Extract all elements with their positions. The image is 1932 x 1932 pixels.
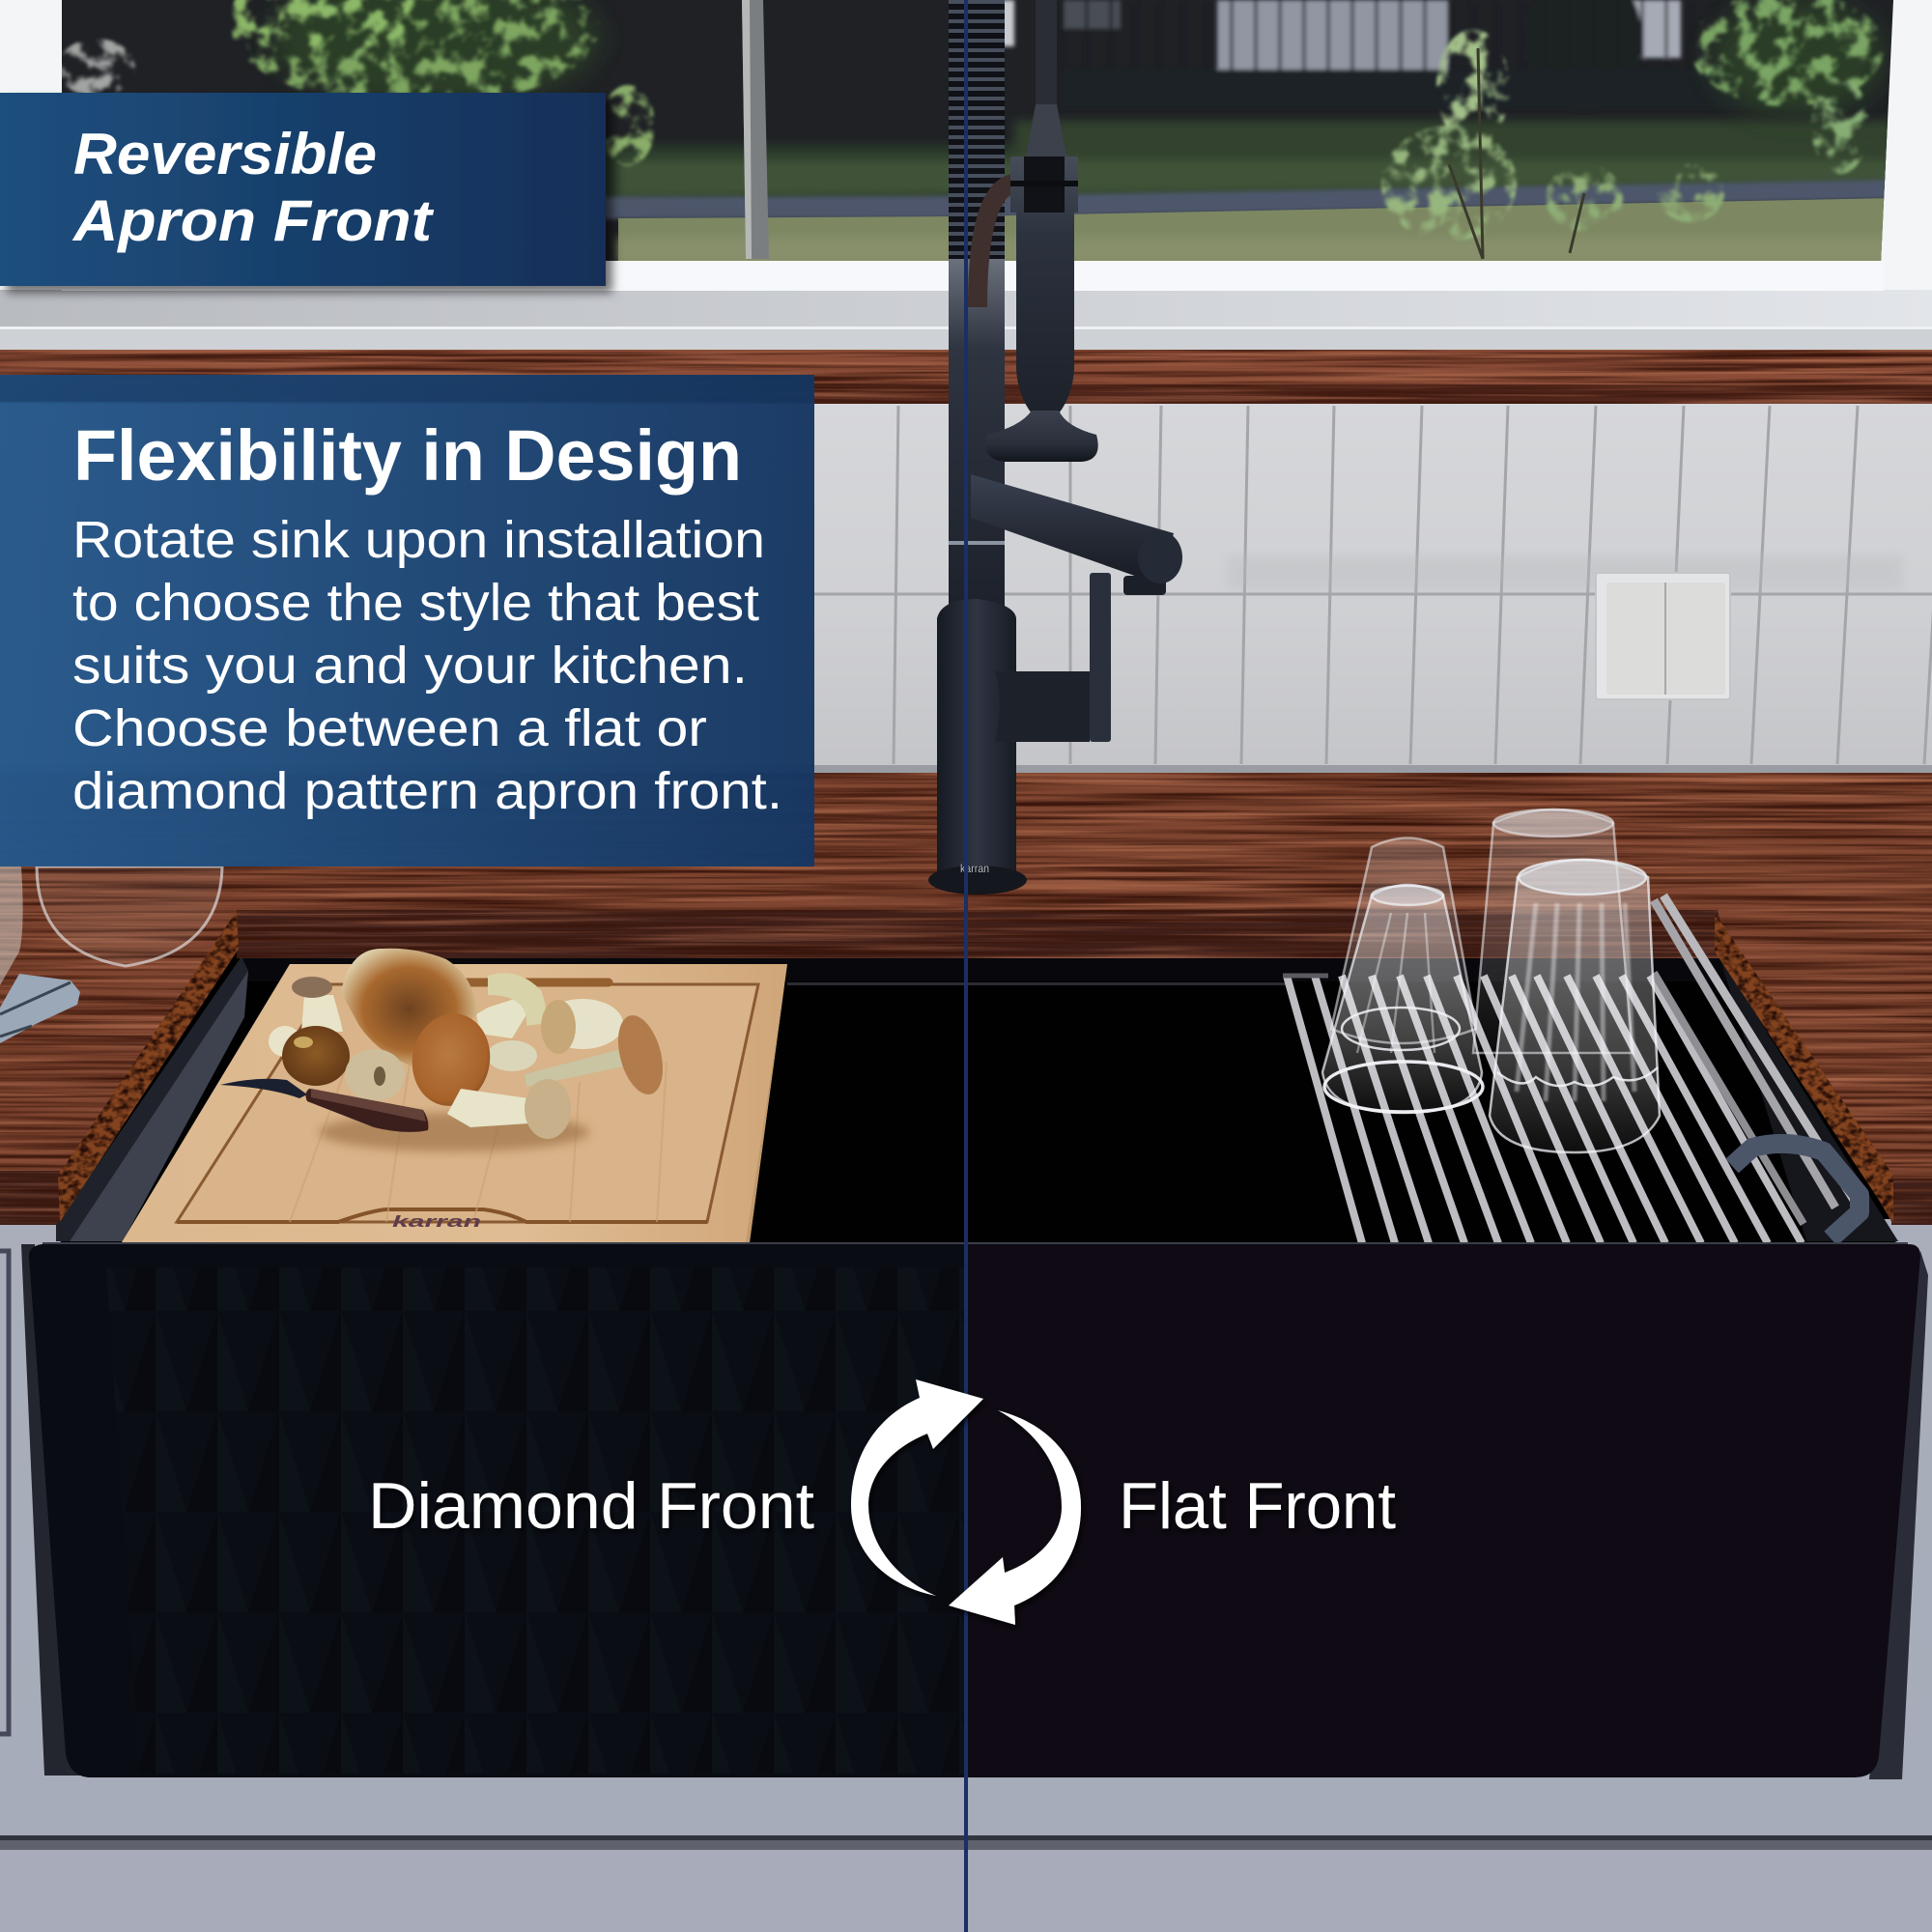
- small stem: [487, 1040, 537, 1071]
- big cap: [341, 949, 477, 1069]
- spray head: [1010, 156, 1078, 413]
- upright pale mushroom: [476, 995, 528, 1038]
- wooden countertop: [0, 773, 1932, 1225]
- heading: reversible apron front: [71, 122, 435, 253]
- right pale mushroom: [542, 999, 623, 1049]
- label: flat front: Flat Front: [1119, 1469, 1396, 1543]
- paring knife: [220, 1079, 428, 1132]
- centre divider line: [964, 0, 968, 1932]
- body text: [72, 511, 782, 820]
- spout: [971, 474, 1174, 584]
- stemless wine glass and towel: [0, 867, 222, 1043]
- body text: to choose the style that best: [72, 574, 759, 632]
- bottom mushroom: [447, 1089, 528, 1127]
- drying rack rods: [1283, 895, 1859, 1243]
- upper stem: [949, 259, 1005, 609]
- pull-down kitchen faucet: karran: [960, 862, 989, 875]
- coiled spring: [949, 0, 1005, 259]
- wooden shelf: [0, 350, 1932, 404]
- long stem with cap: [525, 1047, 634, 1087]
- heading: reversible apron front: Reversible: [73, 122, 377, 186]
- top-left small mushroom: [301, 995, 343, 1032]
- farmhouse apron: base shape and right flat half: [29, 1243, 1920, 1777]
- arrow: right, pointing down: [949, 1410, 1081, 1625]
- background: wall and window frame: [0, 0, 1932, 350]
- foliage: [267, 0, 603, 93]
- heading: flexibility in design: Flexibility in Design: [73, 415, 742, 496]
- medium cap: [405, 1008, 497, 1112]
- label: diamond front: Diamond Front: [368, 1469, 814, 1543]
- sapling: [1381, 29, 1724, 242]
- fence and distant buildings: [1005, 0, 1685, 73]
- brand mark: karran: [392, 1212, 481, 1231]
- cabinetry below sink: [0, 1219, 1932, 1932]
- body text: Choose between a flat or: [72, 699, 707, 757]
- body text: suits you and your kitchen.: [72, 637, 748, 695]
- glass: back centre: [1473, 810, 1633, 1053]
- tree trunk: [742, 0, 769, 259]
- right inner wall: [1719, 956, 1898, 1241]
- panel: reversible apron front: [0, 93, 606, 286]
- braided hose: [1036, 0, 1057, 106]
- body text: Rotate sink upon installation: [72, 511, 765, 569]
- small round mushroom: [345, 1049, 405, 1101]
- sink cut-out edges: [58, 910, 1893, 1222]
- left inner wall: [56, 956, 248, 1241]
- curved arm: [978, 184, 1012, 307]
- window sill white bottom: [62, 261, 1884, 291]
- icon: rotation arrows: [851, 1379, 1081, 1625]
- body text: diamond pattern apron front.: [72, 762, 782, 820]
- glass: front left: [1322, 885, 1483, 1113]
- glass: back left: [1331, 838, 1476, 1050]
- sink basin interior: [56, 956, 1898, 1246]
- faucet body: [937, 599, 1016, 874]
- left stem and dark round cap: [269, 1026, 301, 1057]
- arrow: left, pointing up: [851, 1379, 983, 1596]
- diamond pattern on left half of apron: [106, 1267, 966, 1774]
- apron side bands: [21, 1244, 1928, 1779]
- glass: front right: [1490, 860, 1660, 1152]
- tile backsplash: [0, 404, 1932, 773]
- rack silicone clips: [1732, 1144, 1860, 1238]
- mushrooms on cutting board: [269, 949, 670, 1151]
- light switch: [1596, 573, 1730, 699]
- cutting board: [122, 964, 787, 1242]
- drinking glasses: [1322, 810, 1660, 1152]
- pull-down kitchen faucet: [928, 0, 1182, 895]
- heading: reversible apron front: Apron Front: [71, 188, 435, 253]
- faucet base: [928, 866, 1027, 895]
- panel: flexibility in design: [0, 375, 814, 867]
- lever handle: [995, 573, 1111, 742]
- window: outdoor view: [58, 0, 1893, 263]
